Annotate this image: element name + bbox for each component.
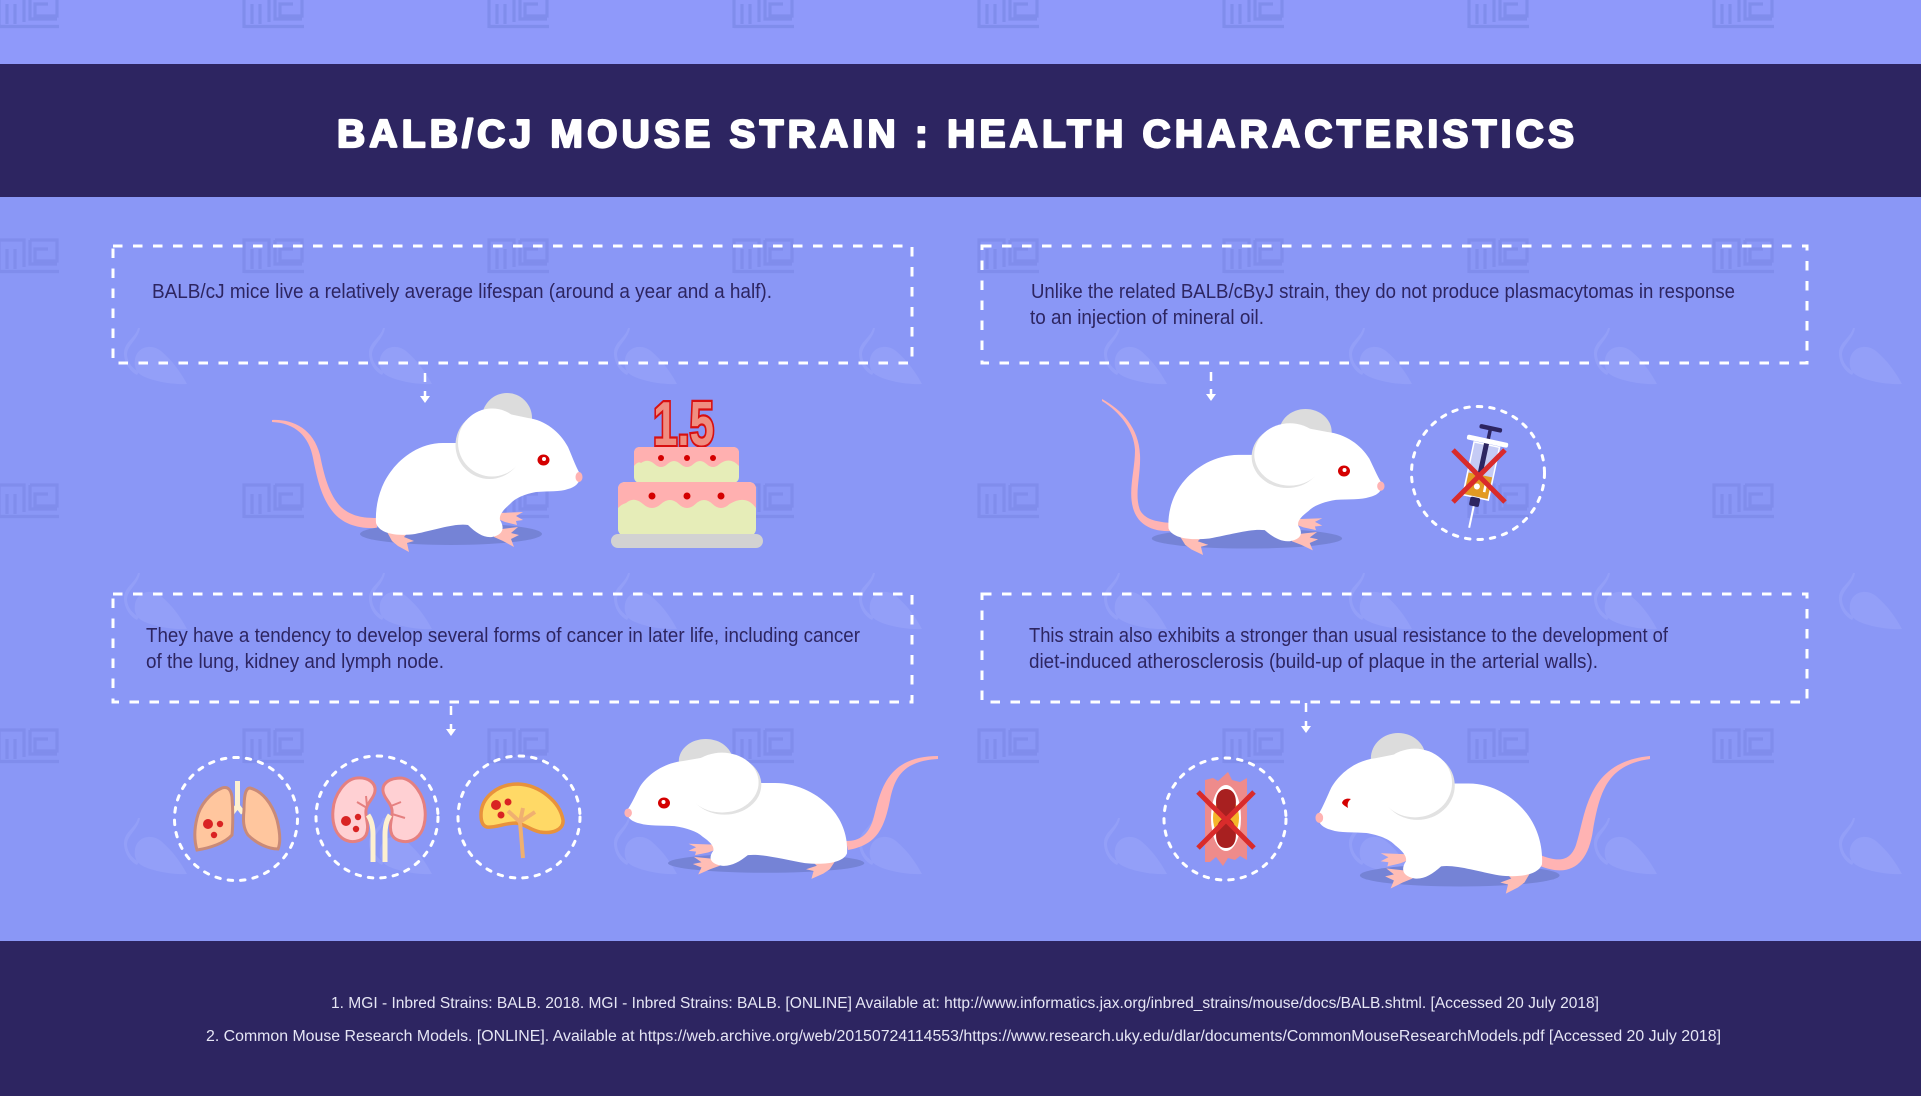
title: BALB/CJ MOUSE STRAIN : HEALTH CHARACTERISTICS bbox=[337, 113, 1574, 156]
panel: lifespan bbox=[113, 246, 912, 552]
dashed box: cancer bbox=[113, 594, 912, 702]
icon: kidneys bbox=[316, 756, 438, 878]
arrow: mineral oil bbox=[1206, 372, 1216, 401]
mouse: mineral oil bbox=[1102, 399, 1384, 555]
mouse: atherosclerosis bbox=[1315, 733, 1650, 894]
icon: birthday cake 1.5 bbox=[611, 390, 763, 548]
panel: cancer bbox=[113, 594, 938, 880]
references: 1. MGI - Inbred Strains: BALB. 2018. MGI - Inbred Strains: BALB. [ONLINE] Available at: http://www.informatics.jax.org/inbred_strains/mouse/docs/BALB.shtml. [Accessed 20 July 2018] bbox=[331, 995, 1599, 1012]
header band bbox=[0, 64, 1921, 197]
text: mineral oil: to an injection of mineral oil. bbox=[1030, 307, 1264, 329]
arrow: cancer bbox=[446, 706, 456, 736]
watermark mice bbox=[124, 328, 1902, 874]
text: cancer: of the lung, kidney and lymph node. bbox=[146, 651, 444, 673]
mouse: lifespan bbox=[272, 393, 582, 552]
text: lifespan: BALB/cJ mice live a relatively average lifespan (around a year and a half). bbox=[152, 281, 772, 303]
dashed box: atherosclerosis bbox=[982, 594, 1807, 702]
dashed box: mineral oil bbox=[982, 246, 1807, 363]
icon: birthday cake 1.5: 1.5 bbox=[653, 390, 714, 459]
text: atherosclerosis: diet-induced atherosclerosis (build-up of plaque in the arterial walls). bbox=[1029, 651, 1598, 673]
text: cancer bbox=[146, 625, 860, 673]
text: mineral oil bbox=[1030, 281, 1735, 329]
icon: lungs bbox=[174, 758, 298, 880]
text: atherosclerosis bbox=[1029, 625, 1668, 673]
watermark logos bbox=[0, 0, 1774, 763]
panel: mineral oil bbox=[982, 246, 1807, 555]
text: mineral oil: Unlike the related BALB/cByJ strain, they do not produce plasmacytomas in response bbox=[1031, 281, 1735, 303]
dashed box: lifespan bbox=[113, 246, 912, 363]
references: 2. Common Mouse Research Models. [ONLINE]. Available at https://web.archive.org/web/20150724114553/https://www.research.uky.edu/dlar/documents/CommonMouseResearchModels.pdf [Accessed 20 July 2018] bbox=[206, 1028, 1721, 1045]
mouse: cancer bbox=[624, 739, 938, 879]
icon: syringe crossed out bbox=[1412, 406, 1544, 540]
arrow: atherosclerosis bbox=[1301, 703, 1311, 733]
text: atherosclerosis: This strain also exhibits a stronger than usual resistance to the development of bbox=[1029, 625, 1668, 647]
icon: artery crossed out bbox=[1164, 758, 1286, 880]
panel: atherosclerosis bbox=[982, 594, 1807, 894]
icon: lymph node bbox=[458, 756, 580, 878]
text: cancer: They have a tendency to develop several forms of cancer in later life, including cancer bbox=[146, 625, 860, 647]
arrow: lifespan bbox=[420, 373, 430, 403]
footer band bbox=[0, 941, 1921, 1096]
references bbox=[206, 995, 1721, 1045]
